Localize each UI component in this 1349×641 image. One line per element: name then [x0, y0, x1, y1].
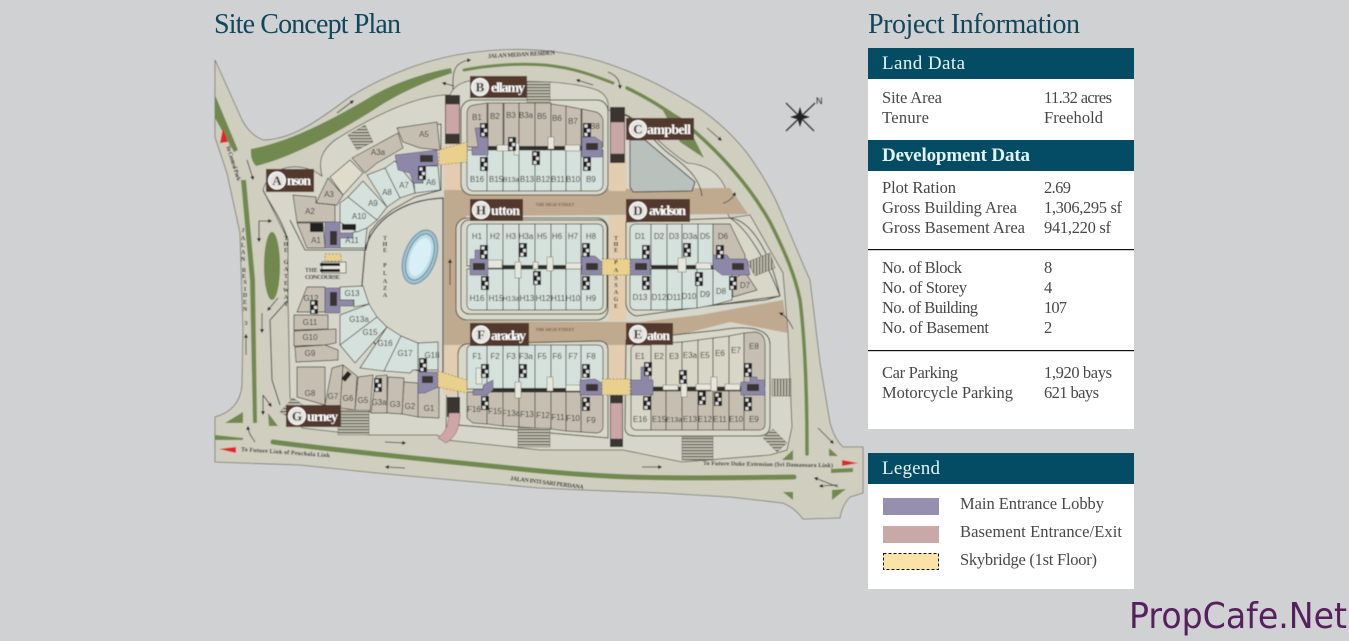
map road and place labels: T: [284, 274, 288, 280]
block: Hutton: H3: [506, 232, 517, 241]
block: Gurney: G3: [390, 400, 401, 409]
block: Faraday: F16: [467, 405, 481, 414]
map road and place labels: S: [614, 283, 618, 289]
development data rows: Gross Building Area: [882, 198, 1018, 217]
block: Bellamy: B7: [568, 117, 578, 126]
legend: basement entrance: Basement Entrance/Exit: [960, 522, 1122, 541]
block: Faraday: F13a: [502, 409, 521, 418]
block: Anson: A3: [324, 190, 334, 199]
block: Eaton: E2: [654, 352, 664, 361]
basement entrances: [438, 95, 625, 447]
block: Gurney: G11: [303, 318, 318, 327]
land data rows: Site Area: [882, 88, 943, 107]
block: Hutton: H13: [520, 294, 535, 303]
label: Anson: [266, 169, 314, 192]
map road and place labels: A: [614, 268, 619, 274]
block: Davidson: D7: [740, 281, 751, 290]
label: Campbell: C: [633, 122, 643, 136]
label: Bellamy: ellamy: [491, 81, 525, 96]
map road and place labels: T: [284, 236, 288, 242]
map road and place labels: THE HIGH STREET: [536, 202, 575, 207]
block: Bellamy: B10: [566, 175, 581, 184]
parking rows: Car Parking: [882, 363, 958, 382]
block: Hutton: [456, 218, 608, 320]
map road and place labels: N: [241, 257, 246, 263]
label: Campbell: ampbell: [647, 123, 691, 138]
block: Hutton: H11: [551, 294, 566, 303]
icon: north compass: N: [816, 96, 822, 106]
block and building counts: No. of Building: [882, 298, 978, 317]
map road and place labels: A: [241, 236, 246, 242]
label: Faraday: F: [477, 327, 485, 342]
passage walkways: [444, 143, 626, 395]
plaza: [362, 198, 443, 375]
block: Faraday: F11: [551, 413, 565, 422]
block: Anson: A11: [345, 236, 359, 245]
map road and place labels: H: [284, 242, 289, 248]
parking rows: [882, 363, 1112, 402]
block: Bellamy: B12: [536, 175, 551, 184]
block: Davidson: D5: [700, 232, 711, 241]
block: Eaton: E8: [749, 342, 759, 351]
label: Gurney: G: [292, 408, 302, 424]
map road and place labels: A: [241, 250, 246, 256]
header: legend: Legend: [882, 458, 940, 479]
block: Faraday: F6: [552, 352, 562, 361]
map road and place labels: H: [614, 242, 619, 248]
map road and place labels: A: [383, 293, 388, 299]
block and building counts: 2: [1044, 318, 1052, 337]
block: Hutton: H12: [536, 294, 551, 303]
legend: main entrance lobby: Main Entrance Lobby: [960, 494, 1105, 513]
block: Anson: A5: [419, 130, 429, 139]
block and building counts: 4: [1044, 278, 1052, 297]
block: Gurney: G16: [377, 339, 393, 348]
block: Bellamy: B6: [552, 114, 562, 123]
legend: main entrance lobby: [883, 494, 1105, 515]
map road and place labels: A: [284, 295, 289, 301]
west plot with Anson, Plaza and Gurney: [263, 95, 462, 440]
map road and place labels: D: [243, 293, 248, 299]
block: Davidson: D12: [652, 293, 667, 302]
block: Davidson: D2: [654, 232, 665, 241]
development data rows: Plot Ration: [882, 178, 956, 197]
high street upper band: [444, 188, 788, 345]
map road and place labels: THE HIGH STREET: [536, 327, 575, 332]
map road and place labels: To Central Park: [224, 145, 241, 182]
block: Anson: A9: [368, 199, 378, 208]
label: Davidson: [626, 199, 690, 222]
block: Faraday: F3: [506, 352, 516, 361]
block: Bellamy: B16: [470, 175, 485, 184]
block: Eaton: E3: [669, 352, 679, 361]
block and building counts: 107: [1044, 298, 1067, 317]
label: Faraday: [470, 323, 529, 346]
map road and place labels: S: [614, 276, 618, 282]
block: Hutton: H15: [489, 294, 504, 303]
block: Bellamy: B5: [537, 112, 547, 121]
label: Bellamy: [470, 76, 527, 98]
block: Hutton: H8: [586, 232, 597, 241]
label: Eaton: [626, 323, 673, 345]
site ground: [215, 50, 863, 519]
label: Bellamy: B: [476, 80, 485, 94]
block: Bellamy: B2: [490, 112, 500, 121]
road kerbs: [263, 115, 780, 405]
ramps and stairs: [280, 82, 791, 460]
block: Gurney: G9: [305, 349, 316, 358]
block: Gurney: G13a: [349, 315, 369, 324]
block: Eaton: E7: [731, 346, 741, 355]
block: Eaton: [625, 328, 770, 436]
block: Faraday: F2: [490, 352, 500, 361]
block: Faraday: F1: [472, 352, 482, 361]
block: Hutton: H2: [490, 232, 501, 241]
header: development data: Development Data: [882, 145, 1030, 166]
map road and place labels: A: [383, 279, 388, 285]
block and building counts: No. of Block: [882, 258, 963, 277]
block: Hutton: H6: [552, 232, 563, 241]
title: Site Concept Plan: Site Concept Plan: [214, 9, 401, 40]
map road and place labels: E: [242, 274, 246, 280]
block: Hutton: H13a: [503, 296, 519, 303]
label: Hutton: [470, 199, 523, 221]
block: Gurney: G15: [362, 328, 378, 337]
map road and place labels: E: [243, 300, 247, 306]
north-east plot: [446, 80, 792, 462]
map road and place labels: E: [284, 248, 288, 254]
panel: legend: [868, 453, 1134, 589]
map road and place labels: G: [614, 297, 619, 303]
block: Gurney: G1: [424, 404, 435, 413]
map road and place labels: To Future Link of Penchala Link: [241, 447, 331, 459]
the concourse: [305, 262, 346, 281]
land data rows: [882, 88, 1112, 127]
block: Davidson: D1: [635, 232, 646, 241]
block: Gurney: G6: [343, 394, 354, 403]
map road and place labels: J: [242, 228, 244, 234]
map road and place labels: P: [383, 263, 387, 269]
map road and place labels: [224, 50, 833, 491]
header: development data: [868, 140, 1134, 171]
block: Anson: A8: [382, 188, 392, 197]
label: Hutton: utton: [491, 204, 520, 219]
block: Eaton: E13: [683, 415, 698, 424]
block: Bellamy: B11: [551, 175, 565, 184]
block: Davidson: D9: [700, 290, 711, 299]
map road and place labels: A: [284, 267, 289, 273]
land data rows: 11.32 acres: [1044, 88, 1112, 107]
block: Hutton: H3a: [519, 232, 534, 241]
block: Bellamy: B8: [590, 122, 600, 131]
block and building counts: No. of Storey: [882, 278, 968, 297]
block and building counts: No. of Basement: [882, 318, 989, 337]
the concourse: CONCOURSE: [305, 275, 340, 281]
label: Anson: A: [272, 173, 282, 188]
block: Gurney: G12: [303, 294, 319, 303]
map road and place labels: P: [614, 260, 618, 266]
block: Eaton: E9: [749, 415, 759, 424]
map road and place labels: Z: [383, 286, 387, 292]
block: Eaton: E13a: [666, 417, 682, 424]
label: Campbell: [626, 118, 694, 140]
block: Campbell: [630, 140, 695, 192]
map road and place labels: T: [614, 236, 618, 242]
legend: skybridge: Skybridge (1st Floor): [960, 550, 1097, 569]
red direction arrows: [219, 128, 858, 466]
block: Eaton: E1: [635, 352, 645, 361]
block: Anson: A1: [311, 236, 321, 245]
block: Gurney: G17: [397, 349, 413, 358]
development data rows: Gross Basement Area: [882, 218, 1026, 237]
block: Hutton: H10: [566, 294, 581, 303]
map road and place labels: N: [243, 307, 248, 313]
block: Anson: A10: [352, 212, 367, 221]
block: Eaton: E11: [713, 415, 727, 424]
map road and place labels: T: [383, 236, 387, 242]
label: Davidson: D: [633, 203, 643, 218]
label: Hutton: H: [476, 202, 486, 218]
block: Faraday: F15: [488, 407, 502, 416]
label: Faraday: araday: [491, 329, 526, 344]
block: Faraday: F10: [566, 414, 580, 423]
block: Davidson: D8: [716, 287, 727, 296]
block: Anson: A7: [399, 181, 409, 190]
skybridges: [325, 142, 630, 395]
map road and place labels: R: [242, 268, 247, 274]
block: Gurney: G8: [305, 389, 316, 398]
block: Faraday: F12: [536, 411, 550, 420]
legend: basement entrance: [883, 522, 1122, 543]
map road and place labels: Y: [284, 302, 289, 308]
block: Anson: [290, 122, 441, 250]
block: Davidson: D3a: [683, 232, 698, 241]
block: Bellamy: B3a: [519, 111, 534, 120]
map road and place labels: H: [383, 242, 388, 248]
map road and place labels: JALAN INTI SARI PERDANA: [510, 476, 585, 491]
block: Eaton: E12: [698, 415, 713, 424]
block: Davidson: [626, 218, 780, 316]
block: Bellamy: B1: [472, 113, 482, 122]
block: Faraday: F5: [537, 352, 547, 361]
block: Hutton: H7: [568, 232, 579, 241]
pond: [395, 225, 445, 289]
parking rows: 1,920 bays: [1044, 363, 1112, 382]
label: Eaton: E: [634, 326, 642, 342]
traffic arrows: [246, 60, 838, 487]
block: Gurney: G13: [344, 289, 360, 298]
block: Bellamy: [461, 100, 608, 195]
map road and place labels: L: [241, 243, 245, 249]
block: Gurney: G3a: [371, 398, 387, 407]
block: Anson: A6: [426, 178, 436, 187]
legend: skybridge: [884, 550, 1097, 570]
land data rows: Tenure: [882, 108, 929, 127]
block: Gurney: G10: [302, 333, 318, 342]
block and building counts: [882, 258, 1067, 337]
block: Hutton: H9: [586, 294, 597, 303]
block: Davidson: D13: [633, 293, 648, 302]
block: Eaton: E10: [729, 415, 744, 424]
header: legend: [868, 453, 1134, 484]
block: Davidson: D6: [718, 232, 729, 241]
block: Gurney: G5: [358, 396, 369, 405]
block: Faraday: F8: [586, 352, 596, 361]
block: Bellamy: B9: [586, 175, 596, 184]
parking rows: Motorcycle Parking: [882, 383, 1013, 402]
block: Anson: A2: [305, 207, 315, 216]
label: Anson: nson: [287, 174, 311, 189]
block: Eaton: E5: [700, 351, 710, 360]
header: land data: Land Data: [882, 53, 966, 74]
map road and place labels: L: [383, 271, 387, 277]
site concept plan map: [215, 50, 863, 519]
block: Faraday: F7: [568, 352, 578, 361]
heading: Project Information: Project Information: [868, 9, 1080, 40]
block: Hutton: H1: [472, 232, 483, 241]
development data rows: 2.69: [1044, 178, 1071, 197]
map road and place labels: W: [283, 288, 289, 294]
block: Bellamy: B13: [520, 175, 535, 184]
map road and place labels: E: [614, 248, 618, 254]
block: Davidson: D10: [682, 292, 697, 301]
map road and place labels: E: [614, 304, 618, 310]
header: land data: [868, 48, 1134, 79]
map road and place labels: G: [284, 260, 289, 266]
block: Bellamy: B13a: [503, 177, 519, 184]
map road and place labels: 3: [244, 321, 248, 327]
development data rows: [882, 178, 1122, 237]
map road and place labels: E: [284, 281, 288, 287]
block: Eaton: E16: [633, 415, 648, 424]
block: Gurney: G18: [424, 351, 440, 360]
landscaped medians: [215, 64, 853, 500]
map road and place labels: JALAN MEDAN RESIDEN: [488, 50, 556, 60]
block: Bellamy: B15: [489, 175, 504, 184]
block: Bellamy: B3: [506, 111, 516, 120]
panel: project information: [868, 48, 1134, 429]
block: Faraday: F3a: [519, 352, 533, 361]
block: Gurney: G2: [405, 402, 416, 411]
block: Faraday: [458, 341, 608, 438]
block: Hutton: H5: [537, 232, 548, 241]
map road and place labels: E: [383, 248, 387, 254]
map road and place labels: S: [243, 280, 247, 286]
development data rows: 1,306,295 sf: [1044, 198, 1122, 217]
block: Eaton: E3a: [683, 351, 698, 360]
map road and place labels: A: [614, 290, 619, 296]
block: Faraday: F13: [520, 410, 534, 419]
block: Eaton: E6: [715, 349, 725, 358]
label: Eaton: aton: [647, 329, 670, 344]
block: Davidson: D11: [667, 293, 682, 302]
label: Gurney: urney: [307, 410, 338, 425]
block: Anson: A3a: [371, 148, 386, 157]
land data rows: Freehold: [1044, 108, 1104, 127]
block: Gurney: [294, 286, 440, 418]
block: Davidson: D3: [669, 232, 680, 241]
block: Gurney: G7: [328, 392, 339, 401]
block: Faraday: F9: [586, 416, 596, 425]
block: Eaton: E15: [652, 415, 667, 424]
icon: north compass: [786, 96, 822, 131]
map road and place labels: I: [244, 287, 247, 293]
development data rows: 941,220 sf: [1044, 218, 1112, 237]
map road and place labels: To Future Duke Extension (Sri Damansara Link): [703, 460, 833, 469]
label: Davidson: avidson: [649, 204, 686, 219]
label: Gurney: [286, 405, 341, 427]
block: Hutton: H16: [470, 294, 485, 303]
parking rows: 621 bays: [1044, 383, 1099, 402]
block and building counts: 8: [1044, 258, 1052, 277]
the concourse: THE: [305, 268, 318, 274]
